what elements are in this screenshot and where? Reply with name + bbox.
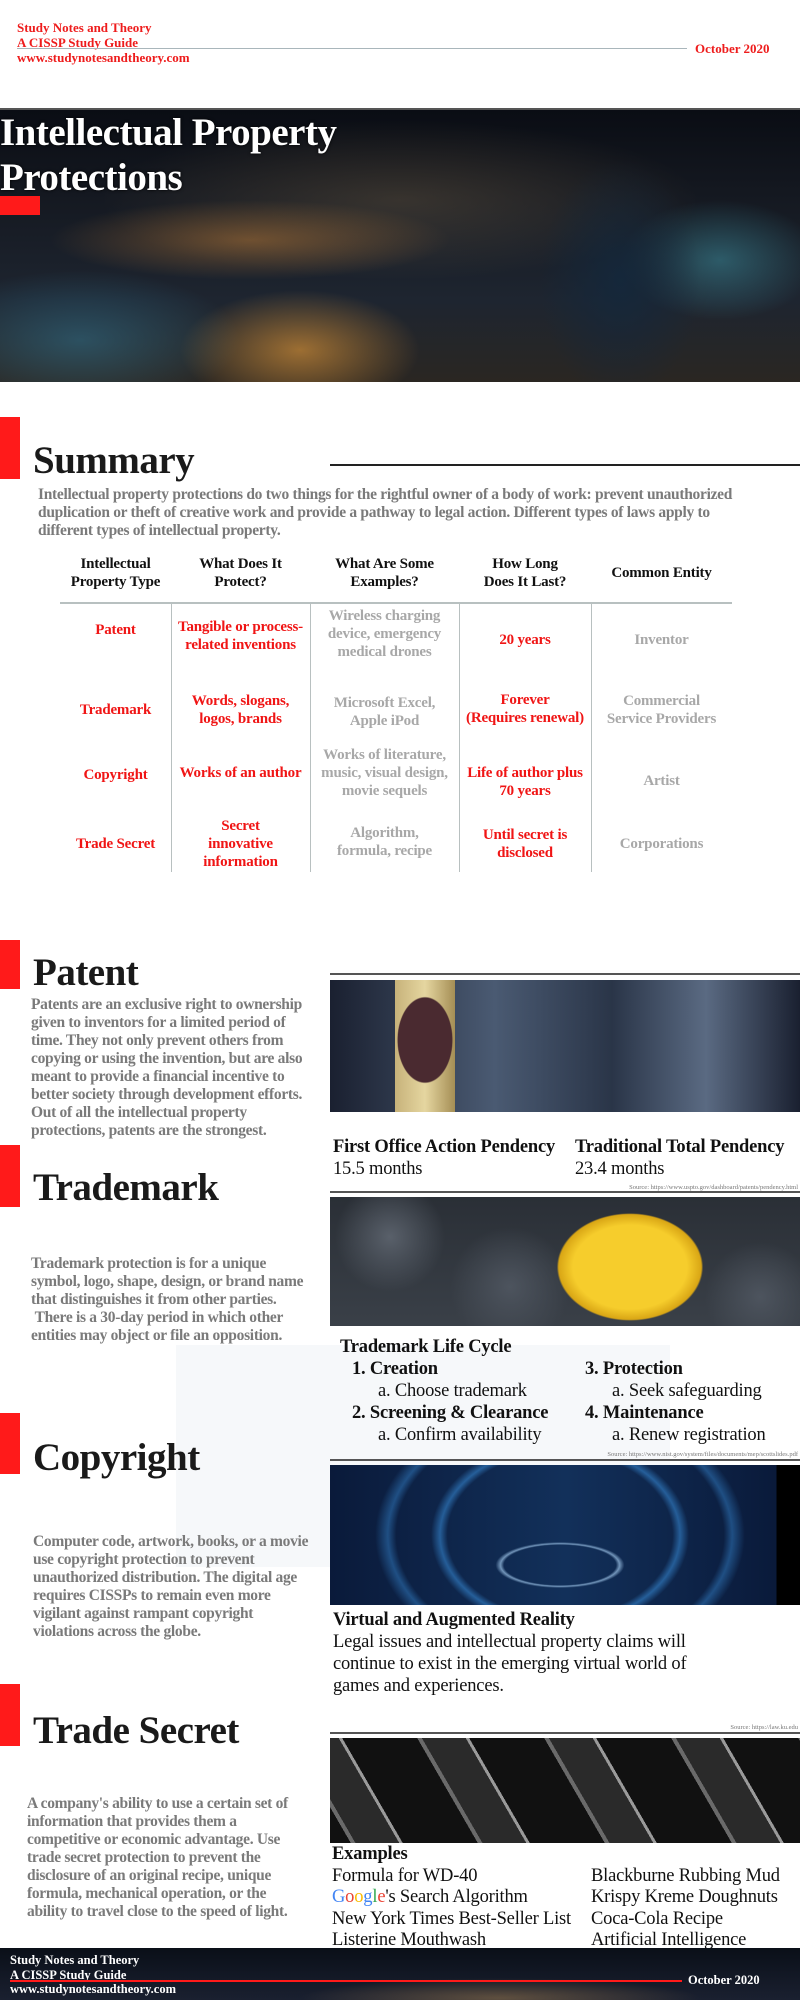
heading: trademark: Trademark [33, 1166, 218, 1209]
header [17, 20, 770, 65]
table header [71, 556, 712, 590]
copyright text: unauthorized distribution. The digital age [33, 1569, 297, 1586]
table header: Common Entity [611, 565, 712, 581]
header text: www.studynotesandtheory.com [17, 50, 190, 65]
text: Source: https://law.ku.edu [730, 1724, 798, 1731]
trademark life cycle [340, 1337, 766, 1445]
trade secret text: ability to travel close to the speed of light. [27, 1903, 287, 1920]
text: Source: https://www.uspto.gov/dashboard/patents/pendency.html [629, 1184, 798, 1191]
examples [332, 1844, 780, 1950]
image: lock [330, 1738, 800, 1843]
stats: pendency: 23.4 months [575, 1159, 664, 1179]
row: trade secret: innovative [208, 836, 273, 852]
header text: Study Notes and Theory [17, 20, 151, 35]
summary text: duplication or theft of creative work and provide a pathway to legal action. Different types of laws apply to [38, 504, 710, 521]
row: trade secret: Corporations [620, 836, 703, 852]
summary text: Intellectual property protections do two things for the rightful owner of a body of work: prevent unauthorized [38, 486, 732, 503]
row: trade secret: formula, recipe [337, 843, 432, 859]
examples: Google's Search Algorithm [332, 1887, 528, 1907]
table header: Examples? [350, 574, 419, 590]
trade secret text [27, 1795, 288, 1920]
row: trademark: (Requires renewal) [466, 710, 584, 726]
row: trade secret: disclosed [497, 845, 553, 861]
trademark life cycle: 2. Screening & Clearance [352, 1403, 548, 1423]
trademark life cycle: a. Confirm availability [378, 1425, 541, 1445]
row: trademark [80, 692, 716, 729]
trade secret text: trade secret protection to prevent the [27, 1849, 261, 1866]
row: copyright: Life of author plus [467, 765, 583, 781]
trademark text: Trademark protection is for a unique [31, 1255, 266, 1272]
copyright text: requires CISSPs to remain even more [33, 1587, 271, 1604]
virtual and augmented reality text: continue to exist in the emerging virtual world of [333, 1654, 686, 1674]
table [60, 556, 732, 872]
row: copyright: Copyright [83, 767, 148, 783]
patent text: meant to provide a financial incentive to [31, 1068, 284, 1085]
table header: Does It Last? [484, 574, 566, 590]
section: trade secret [0, 1684, 288, 1920]
trademark life cycle: 1. Creation [352, 1359, 438, 1379]
footer date: October 2020 [688, 1973, 760, 1987]
stats: pendency: First Office Action Pendency [333, 1137, 555, 1157]
row: patent: medical drones [337, 644, 432, 660]
header text: A CISSP Study Guide [17, 35, 138, 50]
row: trademark: Words, slogans, [192, 693, 289, 709]
table header: How Long [492, 556, 558, 572]
examples: Krispy Kreme Doughnuts [591, 1887, 778, 1907]
section: copyright [0, 1413, 308, 1640]
row: trademark: Trademark [80, 702, 151, 718]
row: copyright: music, visual design, [321, 765, 448, 781]
trademark text: There is a 30-day period in which other [35, 1309, 283, 1326]
footer text [10, 1953, 176, 1996]
copyright text: use copyright protection to prevent [33, 1551, 254, 1568]
footer text: www.studynotesandtheory.com [10, 1982, 176, 1996]
red accent block [0, 196, 40, 215]
virtual and augmented reality text: games and experiences. [333, 1676, 504, 1696]
heading: patent: Patent [33, 951, 138, 994]
row: patent: 20 years [499, 632, 551, 648]
footer [0, 1948, 800, 2000]
table header: Protect? [214, 574, 267, 590]
patent text: given to inventors for a limited period of [31, 1014, 285, 1031]
virtual and augmented reality text: Legal issues and intellectual property claims will [333, 1632, 686, 1652]
stats: pendency: Traditional Total Pendency [575, 1137, 784, 1157]
virtual and augmented reality text [333, 1610, 687, 1696]
row: trade secret: Until secret is [483, 827, 567, 843]
examples: Coca-Cola Recipe [591, 1909, 723, 1929]
row: patent: device, emergency [328, 626, 441, 642]
copyright text: Computer code, artwork, books, or a movie [33, 1533, 308, 1550]
trade secret text: information that provides them a [27, 1813, 237, 1830]
examples: Examples [332, 1844, 408, 1864]
trademark text [31, 1255, 304, 1344]
table: Works of literature, [323, 747, 446, 763]
trademark life cycle: a. Choose trademark [378, 1381, 527, 1401]
row: trade secret: information [203, 854, 278, 870]
row: trade secret: Trade Secret [76, 836, 155, 852]
row: trade secret: Secret [221, 818, 260, 834]
table header: Property Type [71, 574, 160, 590]
patent text [31, 996, 302, 1139]
row: trademark: Forever [500, 692, 550, 708]
summary text: different types of intellectual property. [38, 522, 280, 539]
row: patent: Inventor [634, 632, 689, 648]
patent text: Patents are an exclusive right to ownership [31, 996, 302, 1013]
examples: Listerine Mouthwash [332, 1930, 486, 1950]
trade secret text: competitive or economic advantage. Use [27, 1831, 280, 1848]
row: patent: Patent [95, 622, 136, 638]
trademark life cycle: 4. Maintenance [585, 1403, 703, 1423]
image: gavel [330, 980, 800, 1112]
row: patent: Wireless charging [329, 608, 440, 624]
image: virtual reality [330, 1465, 800, 1605]
row: trademark: Commercial [623, 693, 700, 709]
summary text [38, 486, 732, 539]
heading: copyright: Copyright [33, 1436, 200, 1479]
examples: Artificial Intelligence [591, 1930, 746, 1950]
patent text: copying or using the invention, but are also [31, 1050, 302, 1067]
trademark text: that distinguishes it from other parties. [31, 1291, 276, 1308]
header text [17, 20, 190, 65]
row: patent: related inventions [185, 637, 296, 653]
examples: New York Times Best-Seller List [332, 1909, 571, 1929]
patent text: Out of all the intellectual property [31, 1104, 247, 1121]
patent text: time. They not only prevent others from [31, 1032, 283, 1049]
trade secret text: disclosure of an original recipe, unique [27, 1867, 271, 1884]
stats: pendency: 15.5 months [333, 1159, 422, 1179]
patent text: better society through development efforts. [31, 1086, 302, 1103]
copyright text [33, 1533, 308, 1640]
section: trademark [0, 1145, 304, 1344]
table header: What Does It [199, 556, 282, 572]
watermark box [176, 1345, 670, 1567]
trademark life cycle: 3. Protection [585, 1359, 683, 1379]
patent text: protections, patents are the strongest. [31, 1122, 266, 1139]
trademark life cycle: a. Renew registration [612, 1425, 766, 1445]
trademark life cycle: a. Seek safeguarding [612, 1381, 762, 1401]
footer text: Study Notes and Theory [10, 1953, 139, 1967]
heading: summary: Summary [33, 439, 194, 482]
footer text: A CISSP Study Guide [10, 1968, 126, 1982]
stats: pendency [333, 1137, 784, 1179]
table header: Intellectual [80, 556, 151, 572]
section: patent [0, 940, 302, 1139]
row: copyright: 70 years [499, 783, 551, 799]
row: copyright: Works of an author [180, 765, 301, 781]
row: copyright: movie sequels [342, 783, 427, 799]
trademark text: entities may object or file an opposition. [31, 1327, 282, 1344]
heading: trade secret: Trade Secret [33, 1709, 239, 1752]
section: summary [0, 417, 800, 539]
trademark text: symbol, logo, shape, design, or brand name [31, 1273, 303, 1290]
row: patent: Tangible or process- [178, 619, 303, 635]
image: umbrellas [330, 1197, 800, 1326]
copyright text: violations across the globe. [33, 1623, 201, 1640]
trademark life cycle: Trademark Life Cycle [340, 1337, 511, 1357]
row: copyright [83, 747, 680, 799]
row: copyright: Artist [643, 773, 680, 789]
row: trademark: Service Providers [607, 711, 716, 727]
row: trademark: Microsoft Excel, [334, 695, 435, 711]
row: trademark: logos, brands [199, 711, 282, 727]
date: October 2020 [695, 41, 770, 56]
examples: Formula for WD-40 [332, 1866, 477, 1886]
title [0, 111, 337, 199]
examples: Blackburne Rubbing Mud [591, 1866, 780, 1886]
title: Protections [0, 156, 182, 199]
trade secret text: formula, mechanical operation, or the [27, 1885, 266, 1902]
trade secret text: A company's ability to use a certain set of [27, 1795, 288, 1812]
title: Intellectual Property [0, 111, 336, 154]
row: patent [95, 608, 689, 660]
row: trademark: Apple iPod [350, 713, 419, 729]
row: trade secret [76, 818, 704, 870]
copyright text: vigilant against rampant copyright [33, 1605, 253, 1622]
table header: What Are Some [335, 556, 434, 572]
hero image with title [0, 108, 800, 382]
text: Source: https://www.nist.gov/system/files/documents/mep/scottslides.pdf [607, 1451, 798, 1458]
row: trade secret: Algorithm, [350, 825, 419, 841]
virtual and augmented reality text: Virtual and Augmented Reality [333, 1610, 575, 1630]
